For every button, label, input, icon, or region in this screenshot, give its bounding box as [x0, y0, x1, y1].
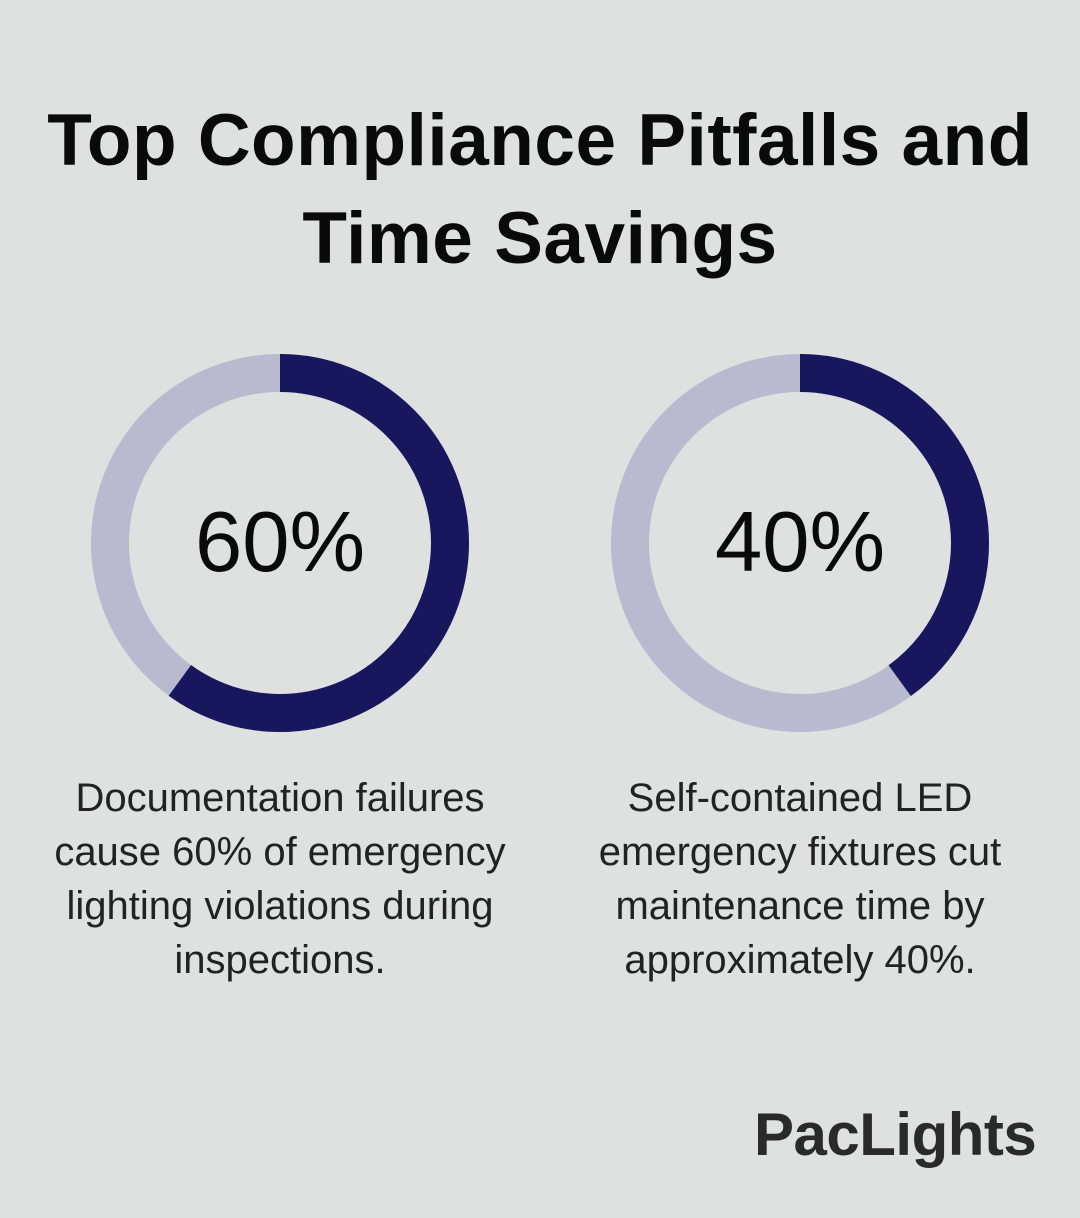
text: LED fixtures: Self-contained LED emergency fixtures cut maintenance time by approximately 40%. [599, 776, 1001, 982]
number: 40%: 40% [715, 495, 885, 590]
number: 60%: 60% [195, 495, 365, 590]
title: Top Compliance Pitfalls and [47, 100, 1033, 181]
donut: 40% [611, 354, 989, 732]
title [47, 100, 1033, 279]
logo: PacLights [754, 1101, 1036, 1168]
title: Time Savings [302, 198, 778, 279]
text: documentation failures: Documentation failures cause 60% of emergency lighting violations during inspections. [54, 776, 506, 982]
donut: 60% [91, 354, 469, 732]
